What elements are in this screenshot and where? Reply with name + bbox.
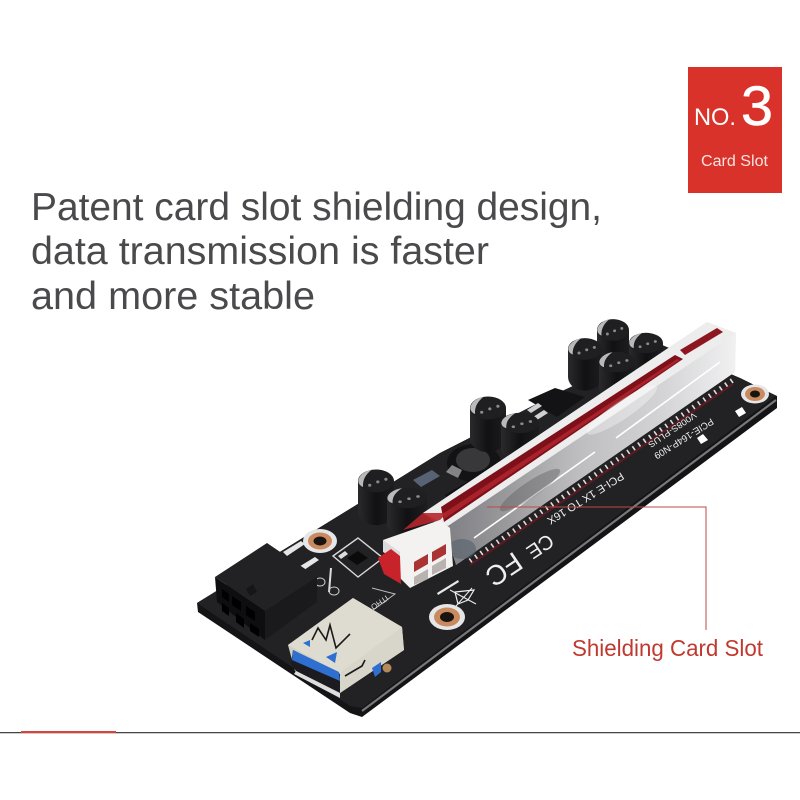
mounting holes xyxy=(303,384,769,630)
callout: Shielding Card Slot: Shielding Card Slot xyxy=(572,635,764,661)
capacitors xyxy=(358,319,663,537)
silkscreen logos and text: CE xyxy=(522,529,558,563)
footer rule with red accent xyxy=(0,731,800,734)
badge: NO.3 Card Slot xyxy=(688,67,782,193)
headline xyxy=(31,186,602,318)
silkscreen logos and text: PCI-E 1X TO 16X xyxy=(544,469,626,527)
slot pins xyxy=(470,380,733,561)
badge: NO.3 Card Slot: 3 xyxy=(741,74,773,137)
silkscreen components: ITHO xyxy=(369,593,390,611)
USB 3.0 port xyxy=(288,598,404,698)
shielded card slot xyxy=(423,322,736,565)
silkscreen logos and text: FC xyxy=(480,546,528,593)
badge: NO.3 Card Slot: NO. xyxy=(694,104,736,131)
6-pin power connector xyxy=(215,543,317,640)
circuit board xyxy=(197,345,777,717)
headline: Patent card slot shielding design, xyxy=(31,186,602,229)
red and white latch xyxy=(378,513,453,588)
silkscreen components xyxy=(283,538,395,618)
silkscreen logos and text: V008S-PLUS xyxy=(646,410,698,450)
silkscreen logos and text: PCIE-164P-N09 xyxy=(652,415,715,461)
leader line to slot xyxy=(487,507,706,630)
inductor and chip xyxy=(413,388,585,503)
product photo: PCIe riser card xyxy=(197,319,777,717)
headline: and more stable xyxy=(31,275,315,318)
headline: data transmission is faster xyxy=(31,230,489,273)
badge: NO.3 Card Slot: Card Slot xyxy=(701,153,769,170)
silkscreen logos and text xyxy=(437,407,746,606)
